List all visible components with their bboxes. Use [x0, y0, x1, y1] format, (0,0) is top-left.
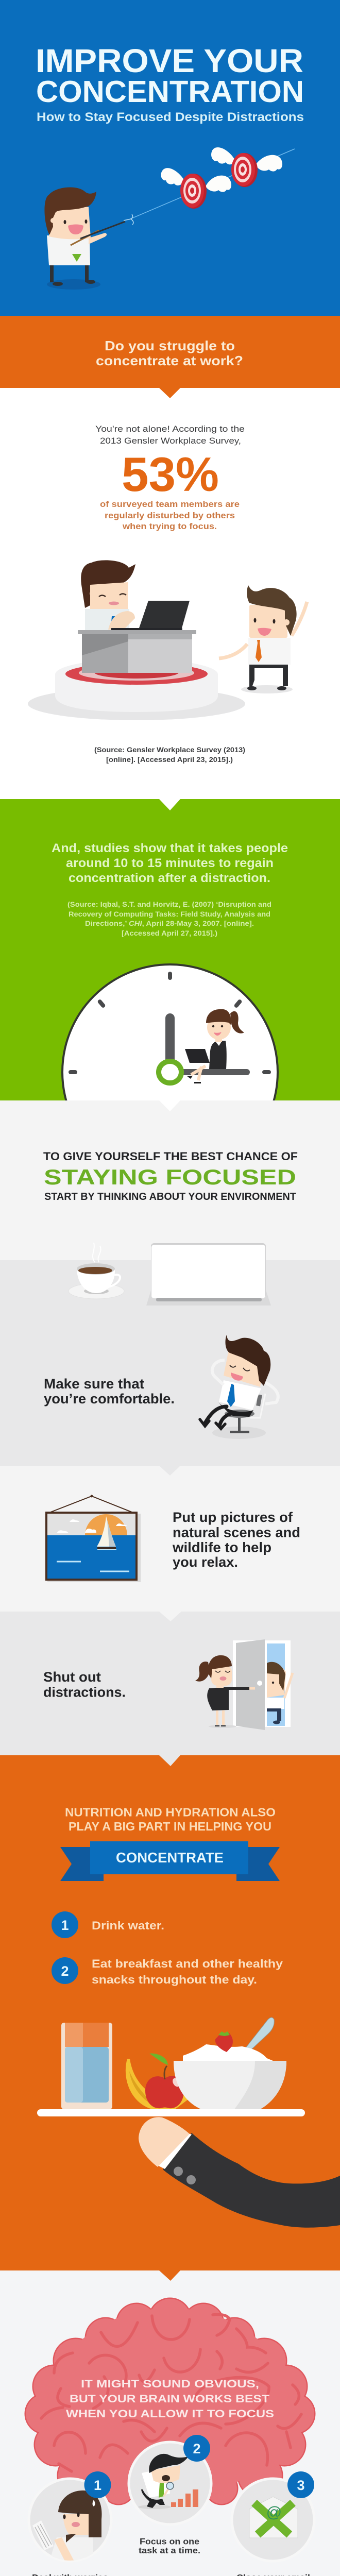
panel: survey statistic: [0, 388, 340, 799]
statement: around 10 to 15 minutes to regain: [66, 856, 274, 870]
tip text: you’re comfortable.: [44, 1391, 175, 1406]
tip 2: focus on one task: task at a time.: [139, 2546, 200, 2555]
tip text: natural scenes and: [173, 1525, 300, 1540]
tip text: Make sure that: [44, 1376, 144, 1392]
tip: drink water: Drink water.: [92, 1919, 164, 1932]
illustration: glass of water: [61, 2023, 112, 2109]
heading line one: TO GIVE YOURSELF THE BEST CHANCE OF: [43, 1150, 298, 1163]
intro text: You're not alone! According to the: [95, 424, 245, 434]
brain heading: [66, 2378, 274, 2420]
illustration: woman on clock hand: [185, 1009, 244, 1083]
brain heading: BUT YOUR BRAIN WORKS BEST: [70, 2393, 269, 2405]
source citation: [Accessed April 27, 2015].): [122, 929, 217, 937]
stat caption: [100, 499, 240, 531]
tip text: [43, 1669, 126, 1700]
stat caption: of surveyed team members are: [100, 499, 240, 509]
source citation: Recovery of Computing Tasks: Field Study, Analysis and: [69, 910, 270, 918]
illustration: clock: [62, 964, 278, 1180]
source citation: [94, 745, 245, 764]
tip text: distractions.: [43, 1685, 126, 1700]
banner heading: Do you struggle to: [105, 338, 235, 353]
banner heading: concentrate at work?: [96, 353, 243, 368]
title: IMPROVE YOUR: [36, 42, 303, 79]
heading: [65, 1805, 276, 1833]
tip 1: deal with worries: 1: [94, 2478, 101, 2493]
tip 1: deal with worries: [29, 2471, 111, 2576]
panel: hero: [0, 0, 340, 316]
source citation: (Source: Iqbal, S.T. and Horvitz, E. (2007) ‘Disruption and: [67, 900, 271, 908]
illustration: apple: [145, 2054, 184, 2108]
panel: nutrition and hydration: [0, 1755, 340, 2270]
stat: 53%: 53%: [122, 447, 219, 501]
illustration: cereal bowl: [174, 2018, 286, 2109]
tip 2: focus on one task: 2: [193, 2441, 201, 2456]
illustration: colleague waving: [219, 585, 307, 693]
illustration: relaxed man in chair: [200, 1335, 278, 1439]
tip text: Put up pictures of: [173, 1510, 293, 1525]
intro text: [95, 424, 245, 446]
ribbon banner: [60, 1841, 280, 1881]
brain heading: IT MIGHT SOUND OBVIOUS,: [81, 2378, 259, 2390]
brain heading: WHEN YOU ALLOW IT TO FOCUS: [66, 2408, 274, 2420]
illustration: brain: [26, 2299, 314, 2504]
tip: eat breakfast: [92, 1957, 283, 1986]
panel: recovery time: [0, 799, 340, 1180]
tip text: you relax.: [173, 1554, 238, 1570]
tip text: Shut out: [43, 1669, 101, 1685]
icon: flying target one: [161, 168, 231, 209]
illustration: door with woman and colleague: [195, 1639, 293, 1730]
statement: concentration after a distraction.: [69, 871, 270, 885]
illustration: framed picture: [45, 1495, 141, 1582]
heading emphasis: STAYING FOCUSED: [44, 1165, 296, 1189]
illustration: banana: [126, 2059, 206, 2109]
banner heading: [96, 338, 243, 368]
tip text: [44, 1376, 175, 1406]
illustration: coffee cup: [69, 1243, 124, 1299]
heading: PLAY A BIG PART IN HELPING YOU: [69, 1820, 271, 1833]
arrow shot line: [130, 149, 295, 219]
illustration: waiter arm: [139, 2117, 340, 2228]
illustration: person stuck at desk on target: [28, 560, 245, 720]
illustration: archer: [44, 187, 133, 290]
tip: eat breakfast: Eat breakfast and other healthy: [92, 1957, 283, 1970]
tip 3: close your email: [232, 2471, 314, 2576]
intro text: 2013 Gensler Workplace Survey,: [100, 436, 241, 446]
panel: natural scenes: [0, 1466, 340, 1612]
ribbon banner: CONCENTRATE: [116, 1850, 224, 1866]
title: [36, 42, 304, 109]
statement: [52, 841, 288, 885]
tip 2: focus on one task: [129, 2435, 211, 2555]
tip 2: focus on one task: Focus on one: [140, 2537, 199, 2546]
badge: 2: 2: [61, 1963, 69, 1979]
tip 3: close your email: @: [266, 2504, 282, 2521]
badge: 1: 1: [61, 1918, 69, 1933]
source citation: (Source: Gensler Workplace Survey (2013): [94, 745, 245, 754]
panel: comfortable: [0, 1243, 340, 1466]
panel: staying focused heading: [0, 1100, 340, 1260]
tip 3: close your email: 3: [297, 2478, 305, 2493]
panel: brain focus tips: [0, 2270, 340, 2576]
subtitle: How to Stay Focused Despite Distractions: [37, 110, 304, 124]
illustration: tray: [37, 2109, 305, 2116]
source citation: Directions,’ CHI, April 28-May 3, 2007. [online].: [85, 919, 254, 927]
source citation: [67, 900, 271, 937]
tip text: wildlife to help: [172, 1539, 271, 1555]
panel: struggle banner: [0, 316, 340, 388]
badge: 1: [52, 1911, 78, 1938]
tip text: [172, 1510, 300, 1570]
tip: eat breakfast: snacks throughout the day.: [92, 1973, 257, 1986]
title: CONCENTRATION: [36, 75, 304, 109]
panel: shut out distractions: [0, 1612, 340, 1755]
heading line three: START BY THINKING ABOUT YOUR ENVIRONMENT: [44, 1191, 296, 1202]
illustration: laptop: [146, 1243, 271, 1306]
statement: And, studies show that it takes people: [52, 841, 288, 855]
badge: 2: [52, 1957, 78, 1984]
stat caption: regularly disturbed by others: [105, 511, 235, 520]
source citation: [online]. [Accessed April 23, 2015].): [106, 755, 233, 764]
stat caption: when trying to focus.: [122, 521, 217, 531]
heading: NUTRITION AND HYDRATION ALSO: [65, 1805, 276, 1819]
icon: flying target two: [211, 147, 282, 187]
